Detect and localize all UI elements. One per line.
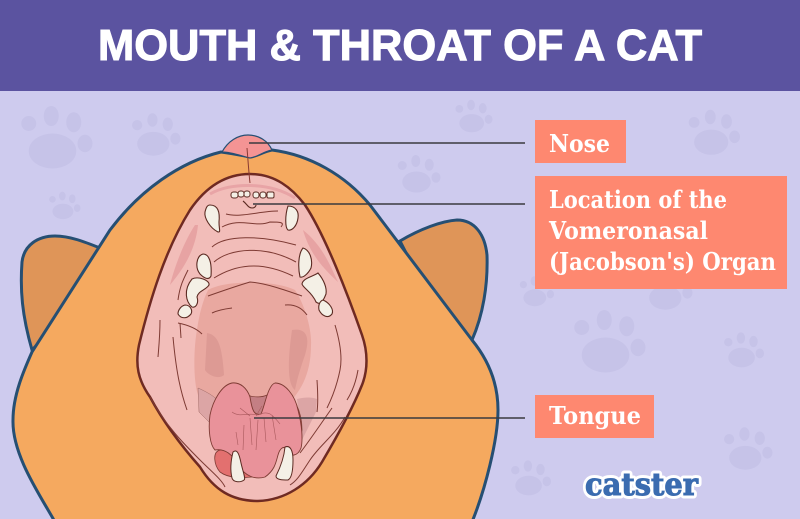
throat	[247, 395, 268, 416]
vomeronasal opening	[243, 201, 256, 208]
icon: left ear	[21, 236, 100, 350]
logo: catster: catster	[585, 467, 699, 503]
label: nose	[535, 120, 626, 163]
tongue side	[215, 387, 302, 477]
tongue texture	[232, 406, 280, 450]
mouth lining	[137, 174, 366, 501]
background paw prints	[21, 100, 772, 495]
title: MOUTH & THROAT OF A CAT	[98, 22, 702, 70]
leader line: tongue	[254, 417, 525, 419]
philtrum line	[247, 148, 250, 183]
palate ridges	[150, 211, 358, 487]
label: tongue: Tongue	[549, 401, 641, 430]
incisor teeth	[231, 191, 274, 198]
tongue	[209, 383, 302, 478]
leader line: vomeronasal organ	[253, 203, 525, 205]
label: vomeronasal organ: Location of the	[549, 185, 727, 214]
upper arc shading	[210, 185, 295, 198]
label: vomeronasal organ: Vomeronasal	[548, 216, 708, 245]
lower canine right	[276, 447, 293, 480]
upper canine teeth and molars	[178, 205, 333, 318]
cat head	[13, 150, 498, 519]
label: nose: Nose	[549, 129, 610, 158]
title	[0, 0, 800, 91]
palate shading	[194, 282, 311, 400]
icon: nose	[222, 135, 272, 158]
icon: right ear	[400, 220, 487, 340]
mouth	[137, 148, 366, 501]
logo: catster: catster	[585, 467, 699, 503]
label: vomeronasal organ	[535, 176, 787, 289]
lower canine left	[231, 451, 245, 482]
leader line: nose	[249, 142, 525, 144]
label: tongue	[535, 395, 654, 438]
